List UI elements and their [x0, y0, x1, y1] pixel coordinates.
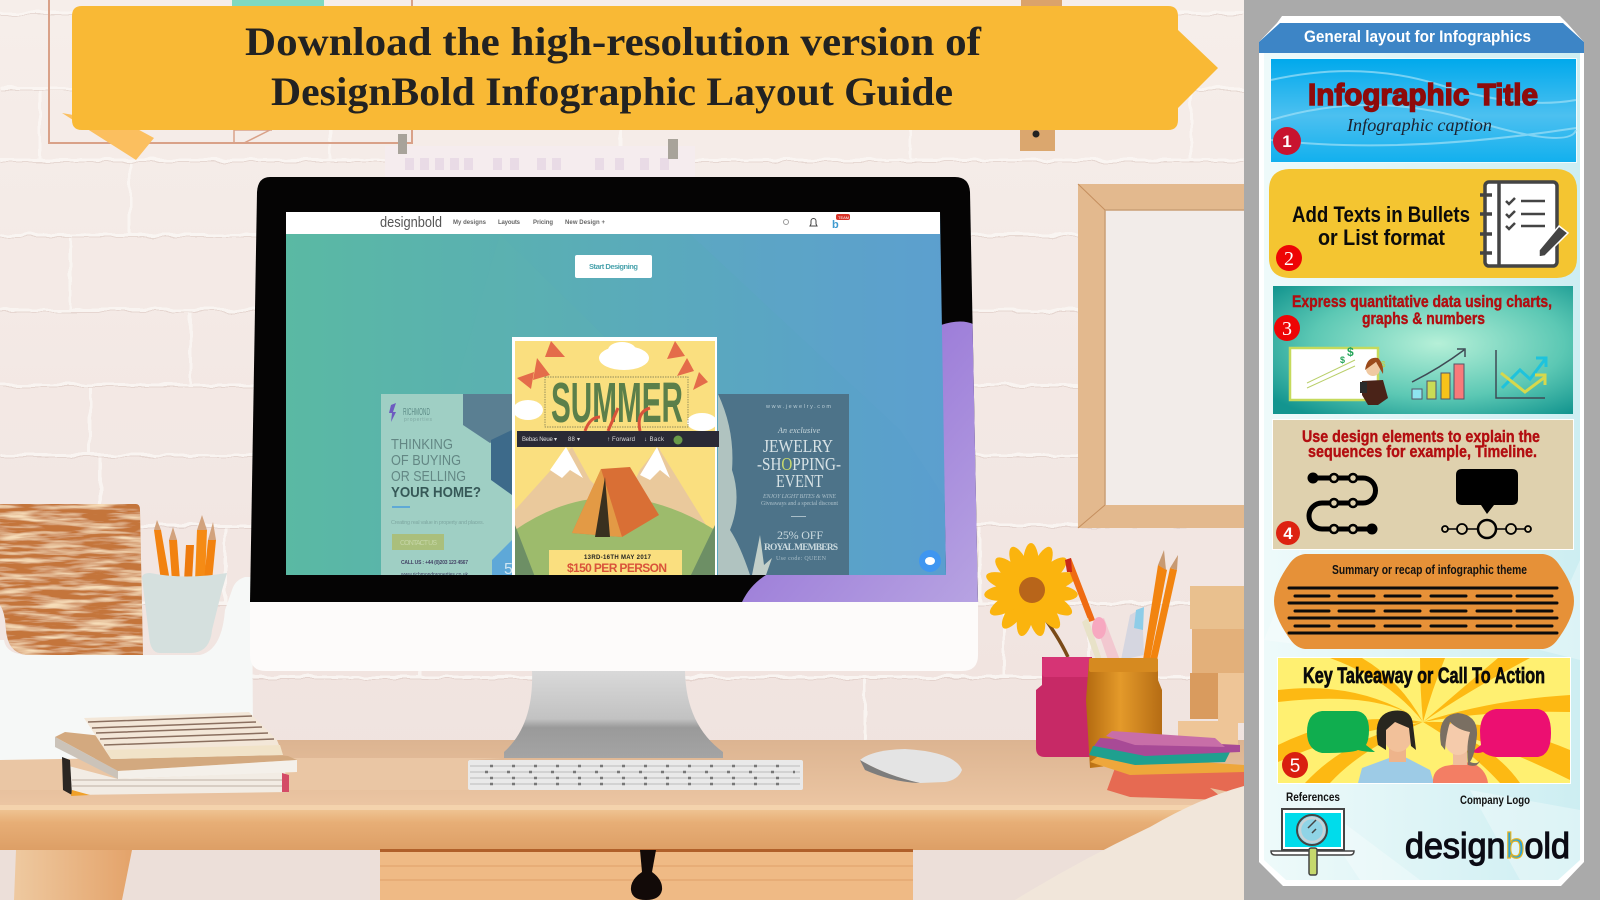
- badge 2: 2: [1284, 248, 1294, 270]
- hill: [515, 498, 715, 577]
- grey sidebar background: [1244, 0, 1600, 900]
- section 3: quantitative data: Express quantitative data using charts,: [1292, 292, 1552, 311]
- left template card: OF BUYING: [391, 452, 461, 469]
- section 5: key takeaway or call to action: [1277, 657, 1571, 784]
- stand: [504, 671, 723, 758]
- badge 5: 5: [1290, 756, 1300, 777]
- badge 4: [1276, 521, 1300, 545]
- pink jar: [1036, 657, 1092, 757]
- center summer camp poster: SUMMER: [551, 371, 683, 435]
- keyboard: [468, 760, 803, 790]
- company logo label: Company Logo: [1460, 793, 1530, 807]
- right template card: [718, 394, 849, 575]
- section 1: infographic title: Infographic caption: [1346, 115, 1492, 135]
- right template card: Giveaways and a special discount: [761, 501, 838, 507]
- beige cushion in foreground: [1015, 786, 1244, 900]
- top striped notebook: [84, 712, 283, 759]
- badge 5: [1282, 752, 1308, 778]
- gold jar: [1086, 658, 1162, 768]
- left template card: RICHMOND: [403, 407, 430, 418]
- download banner: DesignBold Infographic Layout Guide: [271, 69, 953, 114]
- screen: [286, 212, 946, 578]
- bezel: [250, 177, 978, 602]
- left template card: CONTACT US: [400, 540, 437, 547]
- icon: presentation chart and woman: $: [1340, 355, 1345, 365]
- left template card: 5: [504, 561, 513, 578]
- section: summary recap: [1274, 554, 1574, 649]
- left template card: YOUR HOME?: [391, 484, 481, 501]
- section 1: infographic title: Infographic Title: [1308, 77, 1538, 112]
- navigation bar: designbold: [380, 214, 442, 231]
- navigation bar: TEAM: [838, 215, 849, 220]
- start designing button: [575, 255, 652, 278]
- man character: [1358, 711, 1434, 783]
- cork board: [0, 504, 143, 655]
- center summer camp poster: 13RD-16TH MAY 2017: [584, 555, 652, 561]
- text editing toolbar: [517, 431, 719, 447]
- right template card: ENJOY LIGHT BITES & WINE: [762, 494, 836, 500]
- text editing toolbar: 88 ▾: [568, 437, 580, 443]
- right template card: -SHOPPING-: [757, 454, 841, 474]
- section 3: quantitative data: [1273, 286, 1573, 414]
- badge 3: 3: [1282, 318, 1292, 340]
- stack of sticky notes: [1089, 731, 1244, 800]
- badge 3: [1274, 315, 1300, 341]
- brick wall background: [0, 0, 1244, 900]
- tent: [572, 467, 659, 537]
- left template card: THINKING: [391, 436, 453, 453]
- woman character: [1433, 713, 1488, 783]
- sunburst rays: [1278, 658, 1570, 783]
- pens and pencils in jar: [1065, 550, 1178, 660]
- left template card: properties: [404, 417, 432, 423]
- download banner: [72, 6, 1218, 130]
- chat bubble icon: [919, 550, 941, 572]
- right template card: ROYAL MEMBERS: [764, 543, 838, 553]
- badge 4: 4: [1283, 524, 1293, 543]
- right template card: www.jewelry.com: [765, 404, 831, 410]
- left template card: CALL US : +44 (0)203 123 4567: [401, 560, 468, 566]
- icon: presentation chart and woman: $: [1347, 345, 1354, 359]
- panel header: General layout for Infographics: [1304, 27, 1531, 46]
- desk drawer: [380, 849, 913, 900]
- pencils: [154, 515, 216, 581]
- right template card: EVENT: [776, 471, 823, 491]
- center summer camp poster: $150 PER PERSON: [567, 561, 667, 575]
- section 3: quantitative data: graphs & numbers: [1362, 309, 1485, 328]
- imac monitor: [250, 177, 978, 758]
- stack of notebooks: [55, 712, 297, 796]
- section 2: bullets and lists: [1269, 169, 1577, 278]
- badge 2: [1276, 245, 1302, 271]
- badge 1: 1: [1282, 132, 1292, 151]
- icon: winding path timeline: [1308, 472, 1378, 534]
- bottom notebook: [65, 765, 289, 795]
- icon: growth bar chart: [1412, 349, 1465, 399]
- designbold logo: designbold: [1405, 825, 1570, 866]
- wooden blocks: [1178, 586, 1244, 746]
- left template card: www.richmondproperties.co.uk: [401, 572, 468, 578]
- section 2: bullets and lists: Add Texts in Bullets: [1292, 202, 1470, 227]
- desk leg: [14, 850, 132, 900]
- badge 1: [1273, 127, 1301, 155]
- panel header: [1259, 23, 1584, 53]
- right template card: An exclusive: [777, 426, 820, 435]
- middle notebook: [55, 732, 297, 771]
- start designing button: Start Designing: [589, 262, 638, 271]
- navigation bar: b: [832, 219, 839, 231]
- navigation bar: New Design +: [565, 220, 605, 226]
- icon: presentation chart and woman: $: [1381, 360, 1386, 369]
- right template card: JEWELRY: [763, 436, 833, 456]
- right template card: 25% OFF: [777, 528, 823, 542]
- panel sheet: [1259, 16, 1584, 886]
- green speech bubble: [1307, 711, 1375, 753]
- left template card: OR SELLING: [391, 468, 466, 485]
- text editing toolbar: ↑ Forward: [607, 437, 635, 443]
- text editing toolbar: ↓ Back: [644, 437, 665, 443]
- wall decor: wire grid, notes, clips and palette paper: [49, 0, 1062, 178]
- left template card: [381, 394, 513, 578]
- download banner: Download the high-resolution version of: [245, 19, 982, 64]
- icon: laptop with magnifier: [1271, 809, 1354, 875]
- icon: presentation chart and woman: [1290, 345, 1388, 405]
- text editing toolbar: Bebas Neue ▾: [522, 437, 557, 443]
- navigation bar: Layouts: [498, 220, 521, 226]
- mouse: [860, 749, 962, 783]
- icon: notebook with checklist: [1480, 182, 1568, 266]
- picture frame: [1078, 184, 1248, 528]
- flower: [983, 543, 1079, 657]
- references label: References: [1286, 790, 1340, 804]
- pink speech bubble: [1472, 709, 1551, 757]
- purple reflection: [742, 322, 978, 602]
- monitor chin: [250, 602, 978, 671]
- navigation bar: My designs: [453, 220, 487, 226]
- mountains: [515, 447, 706, 529]
- icon: line chart: [1496, 350, 1546, 398]
- center summer camp poster: [512, 337, 717, 577]
- icon: speech callout over horizontal timeline: [1442, 469, 1531, 538]
- section 1: infographic title: [1270, 58, 1577, 163]
- mug: [142, 573, 227, 653]
- panel: general layout guide: [1259, 16, 1584, 886]
- ticket: [549, 550, 682, 577]
- wooden desk: [0, 740, 1244, 900]
- left template card: Creating real value in property and places.: [391, 520, 484, 526]
- section 4: sequences and timeline: [1272, 419, 1574, 550]
- section: summary recap: Summary or recap of infographic theme: [1332, 563, 1527, 577]
- navigation bar: [286, 212, 940, 234]
- text placeholder lines: [1289, 588, 1557, 633]
- white desk organiser with cork board and mug: [0, 504, 253, 760]
- section 4: sequences and timeline: Use design elements to explain the: [1302, 427, 1540, 446]
- right template card: Use code: QUEEN: [776, 556, 827, 562]
- section 2: bullets and lists: or List format: [1318, 225, 1446, 250]
- navigation bar: Pricing: [533, 220, 553, 226]
- section 4: sequences and timeline: sequences for example, Timeline.: [1308, 442, 1537, 461]
